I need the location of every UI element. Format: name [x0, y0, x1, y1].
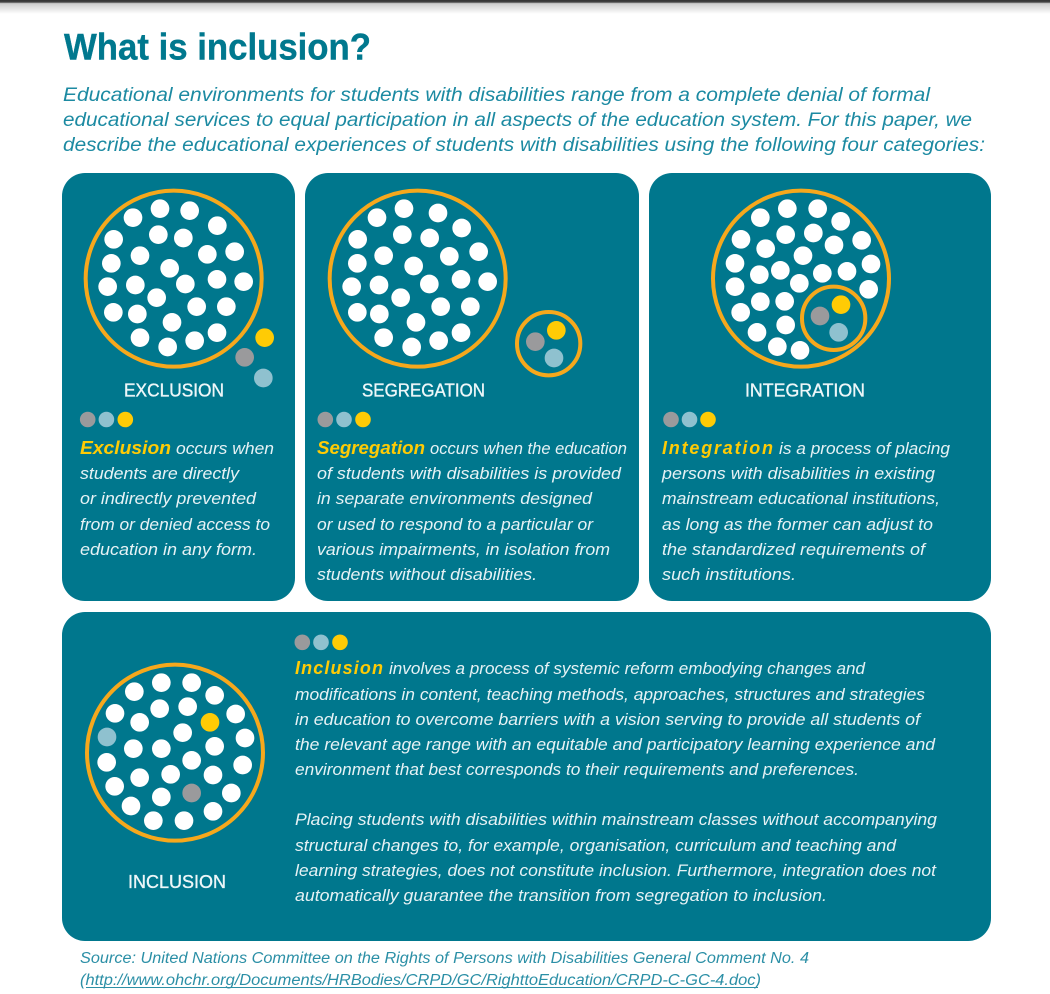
icon: integration diagram — [713, 191, 889, 367]
text: integration definition: as long as the former can adjust to — [662, 516, 933, 534]
panel: segregation — [305, 173, 639, 601]
source note: Source: United Nations Committee on the Rights of Persons with Disabilities General Comment No. 4 — [80, 950, 809, 967]
text: segregation definition: Segregation — [317, 438, 425, 458]
text: inclusion definition: involves a process of systemic reform embodying changes and — [389, 660, 866, 678]
text: integration definition: the standardized requirements of — [662, 541, 928, 559]
text: inclusion note: learning strategies, does not constitute inclusion. Furthermore, integration does not — [295, 862, 937, 880]
text: integration definition: mainstream educational institutions, — [662, 490, 940, 508]
text: integration definition: Integration — [662, 438, 773, 458]
source note — [80, 950, 809, 989]
icon: segregation diagram — [330, 191, 580, 375]
text: integration definition — [661, 438, 951, 584]
source note: (http://www.ohchr.org/Documents/HRBodies/CRPD/GC/RighttoEducation/CRPD-C-GC-4.doc) — [80, 972, 761, 989]
intro paragraph: describe the educational experiences of students with disabilities using the following four categories: — [63, 135, 985, 156]
text: inclusion note: automatically guarantee the transition from segregation to inclusion. — [295, 887, 827, 905]
panel: integration — [649, 173, 991, 601]
text: segregation definition: students without disabilities. — [317, 566, 537, 584]
text: exclusion definition: Exclusion — [80, 438, 171, 458]
text: exclusion definition: from or denied access to — [80, 516, 270, 534]
icon: inclusion diagram — [87, 665, 263, 841]
title: What is inclusion? — [64, 26, 371, 68]
panel: inclusion — [62, 612, 991, 941]
text: inclusion definition: modifications in content, teaching methods, approaches, structures and strategies — [295, 686, 925, 704]
text: integration definition: is a process of placing — [779, 440, 951, 458]
text: segregation definition: occurs when the education — [430, 440, 627, 458]
label: inclusion: INCLUSION — [128, 872, 226, 892]
text: exclusion definition: occurs when — [176, 440, 274, 458]
text: inclusion definition: Inclusion — [295, 658, 383, 678]
text: segregation definition: various impairments, in isolation from — [317, 541, 610, 559]
label: exclusion: EXCLUSION — [124, 380, 224, 400]
text: segregation definition: in separate environments designed — [317, 490, 593, 508]
text: exclusion definition: or indirectly prevented — [80, 490, 257, 508]
text: integration definition: such institutions. — [662, 566, 796, 584]
text: segregation definition: of students with disabilities is provided — [317, 465, 622, 483]
intro paragraph — [63, 85, 985, 156]
text: inclusion note: Placing students with disabilities within mainstream classes without accompanying — [295, 811, 938, 829]
icon: three dots — [663, 412, 716, 427]
text: inclusion definition: the relevant age range with an equitable and participatory learning experience and — [295, 736, 936, 754]
text: inclusion note — [295, 811, 938, 905]
icon: three dots — [294, 634, 348, 650]
text: integration definition: persons with disabilities in existing — [661, 465, 936, 483]
text: inclusion definition — [295, 658, 936, 779]
intro paragraph: Educational environments for students with disabilities range from a complete denial of formal — [63, 85, 931, 106]
icon: three dots — [80, 412, 133, 427]
label: segregation: SEGREGATION — [362, 380, 485, 400]
text: inclusion definition: in education to overcome barriers with a vision serving to provide all students of — [295, 711, 923, 729]
icon: exclusion diagram — [86, 191, 274, 387]
text: exclusion definition — [80, 438, 274, 559]
text: inclusion note: structural changes to, for example, organisation, curriculum and teaching and — [295, 837, 897, 855]
text: exclusion definition: education in any form. — [80, 541, 257, 559]
label: integration: INTEGRATION — [745, 380, 865, 400]
text: inclusion definition: environment that best corresponds to their requirements and preferences. — [295, 761, 859, 779]
text: exclusion definition: students are directly — [80, 465, 241, 483]
intro paragraph: educational services to equal participation in all aspects of the education system. For this paper, we — [63, 110, 972, 131]
text: segregation definition: or used to respond to a particular or — [317, 516, 595, 534]
panel: exclusion — [62, 173, 295, 601]
text: segregation definition — [317, 438, 627, 584]
icon: three dots — [318, 412, 371, 427]
